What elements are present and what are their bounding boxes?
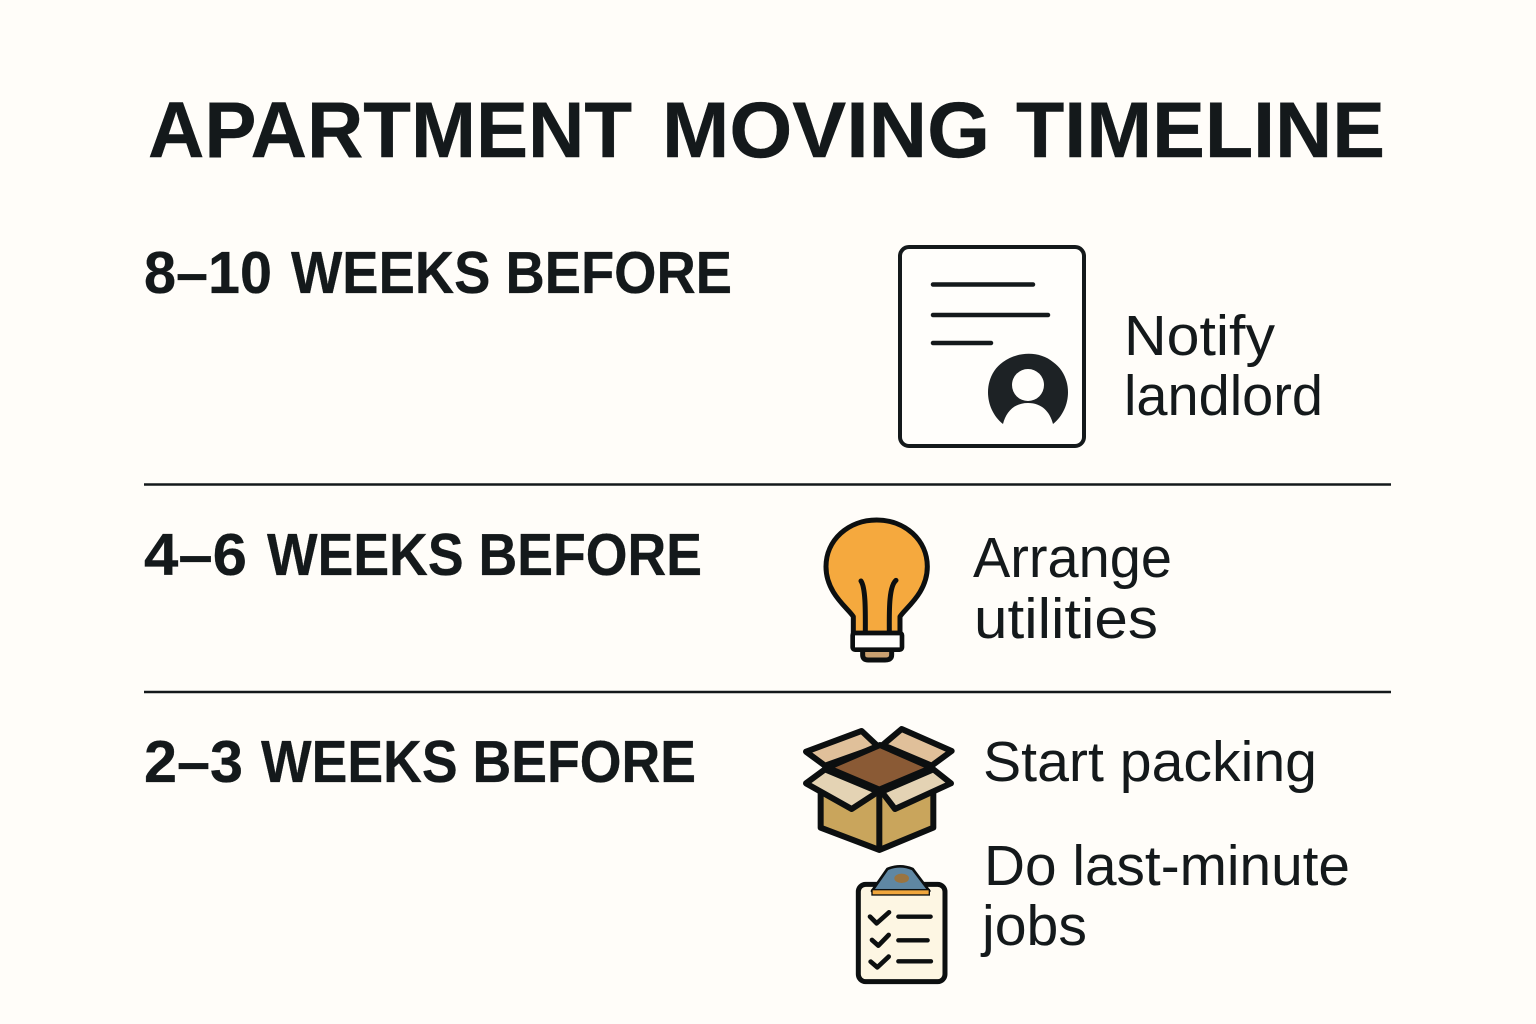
icon: lease document [900, 247, 1084, 446]
icon: cardboard box [806, 729, 952, 850]
icon: clipboard checklist [858, 866, 945, 982]
heading: 2–3 weeks before: 2–3 [144, 729, 243, 795]
title: APARTMENT [148, 85, 632, 174]
text: notify landlord [1124, 304, 1323, 428]
heading: 4–6 weeks before: WEEKS BEFORE [267, 522, 702, 588]
icon: light bulb [826, 520, 927, 660]
text: do last-minute jobs: Do last-minute [984, 834, 1350, 898]
heading: 2–3 weeks before: WEEKS BEFORE [261, 729, 696, 795]
text: arrange utilities: Arrange [973, 526, 1172, 590]
text: arrange utilities [973, 526, 1172, 651]
title [148, 85, 1385, 174]
text: notify landlord: landlord [1124, 364, 1323, 428]
heading: 8–10 weeks before: 8–10 [144, 240, 272, 306]
text: do last-minute jobs [980, 834, 1350, 958]
text: do last-minute jobs: jobs [980, 894, 1087, 958]
heading: 8–10 weeks before: WEEKS BEFORE [291, 240, 732, 306]
text: notify landlord: Notify [1124, 304, 1276, 368]
text: start packing: Start packing [983, 730, 1317, 794]
text: arrange utilities: utilities [974, 587, 1158, 651]
title: MOVING [662, 85, 990, 174]
heading: 4–6 weeks before: 4–6 [144, 522, 247, 588]
title: TIMELINE [1016, 85, 1385, 174]
